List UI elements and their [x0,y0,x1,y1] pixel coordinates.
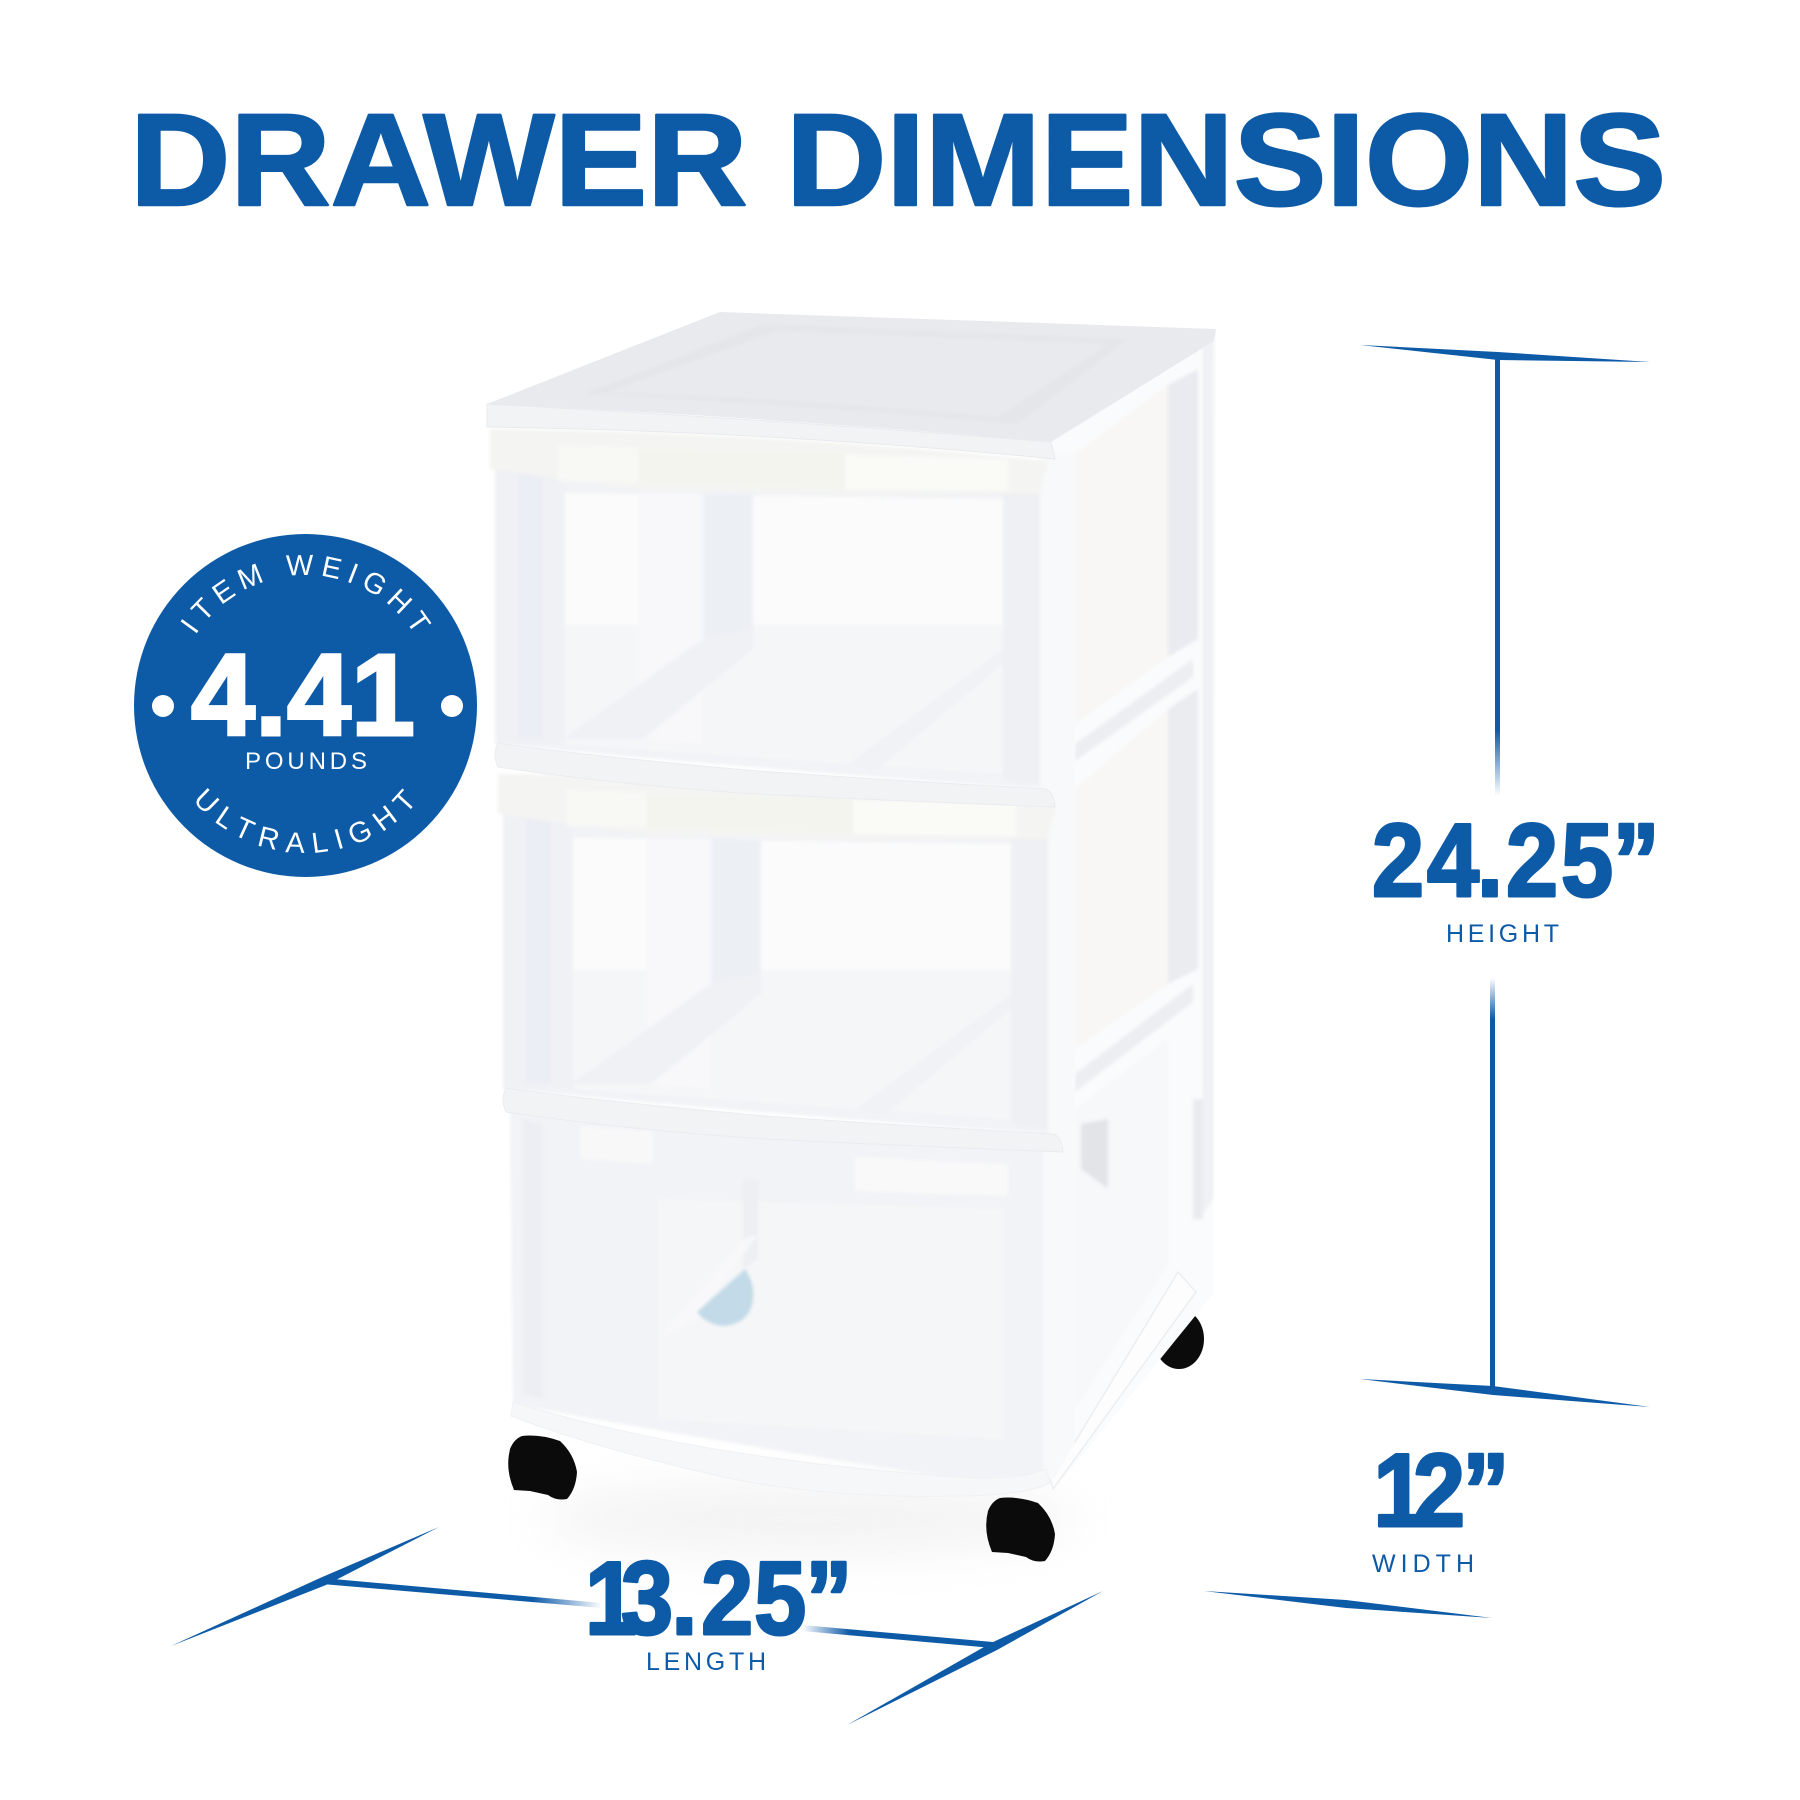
icon: front right caster [986,1498,1055,1562]
length value: 13.25” [585,1539,852,1656]
badge arc text: ultralight: ULTRALIGHT [196,788,413,853]
left tick [171,1527,439,1646]
upper line [1495,357,1500,797]
dimension: height [1360,345,1660,1407]
icon: back caster [1154,1309,1204,1369]
height value: 24.25” [1372,801,1660,918]
bottom tick [1360,1379,1650,1407]
front column [1038,449,1075,1479]
height label: HEIGHT [1446,920,1559,948]
badge value: 4.41 [191,630,415,760]
badge unit: POUNDS [245,748,367,775]
title: DRAWER DIMENSIONS [130,86,1666,233]
floor shadow [538,1485,1078,1553]
product photo: three-drawer cart [487,312,1216,1562]
badge arc text: item weight: ITEM WEIGHT [180,554,432,634]
base rail [1048,1272,1196,1489]
blue wedge reflection [697,1269,753,1326]
lower line [1490,978,1495,1390]
cabinet side panel [1048,329,1216,1491]
width value: 12” [1373,1431,1509,1548]
panel: drawer 2 [498,774,1063,1152]
badge: item weight [134,534,477,877]
icon: front left caster [508,1436,577,1500]
length line right [802,1625,993,1648]
drawer 3 bottom lip [511,1402,1050,1496]
right tick [847,1591,1103,1725]
panel: drawer 1 [490,429,1055,807]
lid [487,312,1216,459]
width label: WIDTH [1372,1550,1474,1578]
dimension: length [171,1527,1103,1725]
panel: drawer 3 [510,1104,1050,1496]
length label: LENGTH [646,1648,766,1676]
length line left [322,1578,602,1608]
width tick [1204,1591,1492,1618]
dimension: width [1204,1431,1509,1618]
badge dot left [152,695,174,717]
badge dot right [441,695,463,717]
top tick [1360,345,1650,362]
